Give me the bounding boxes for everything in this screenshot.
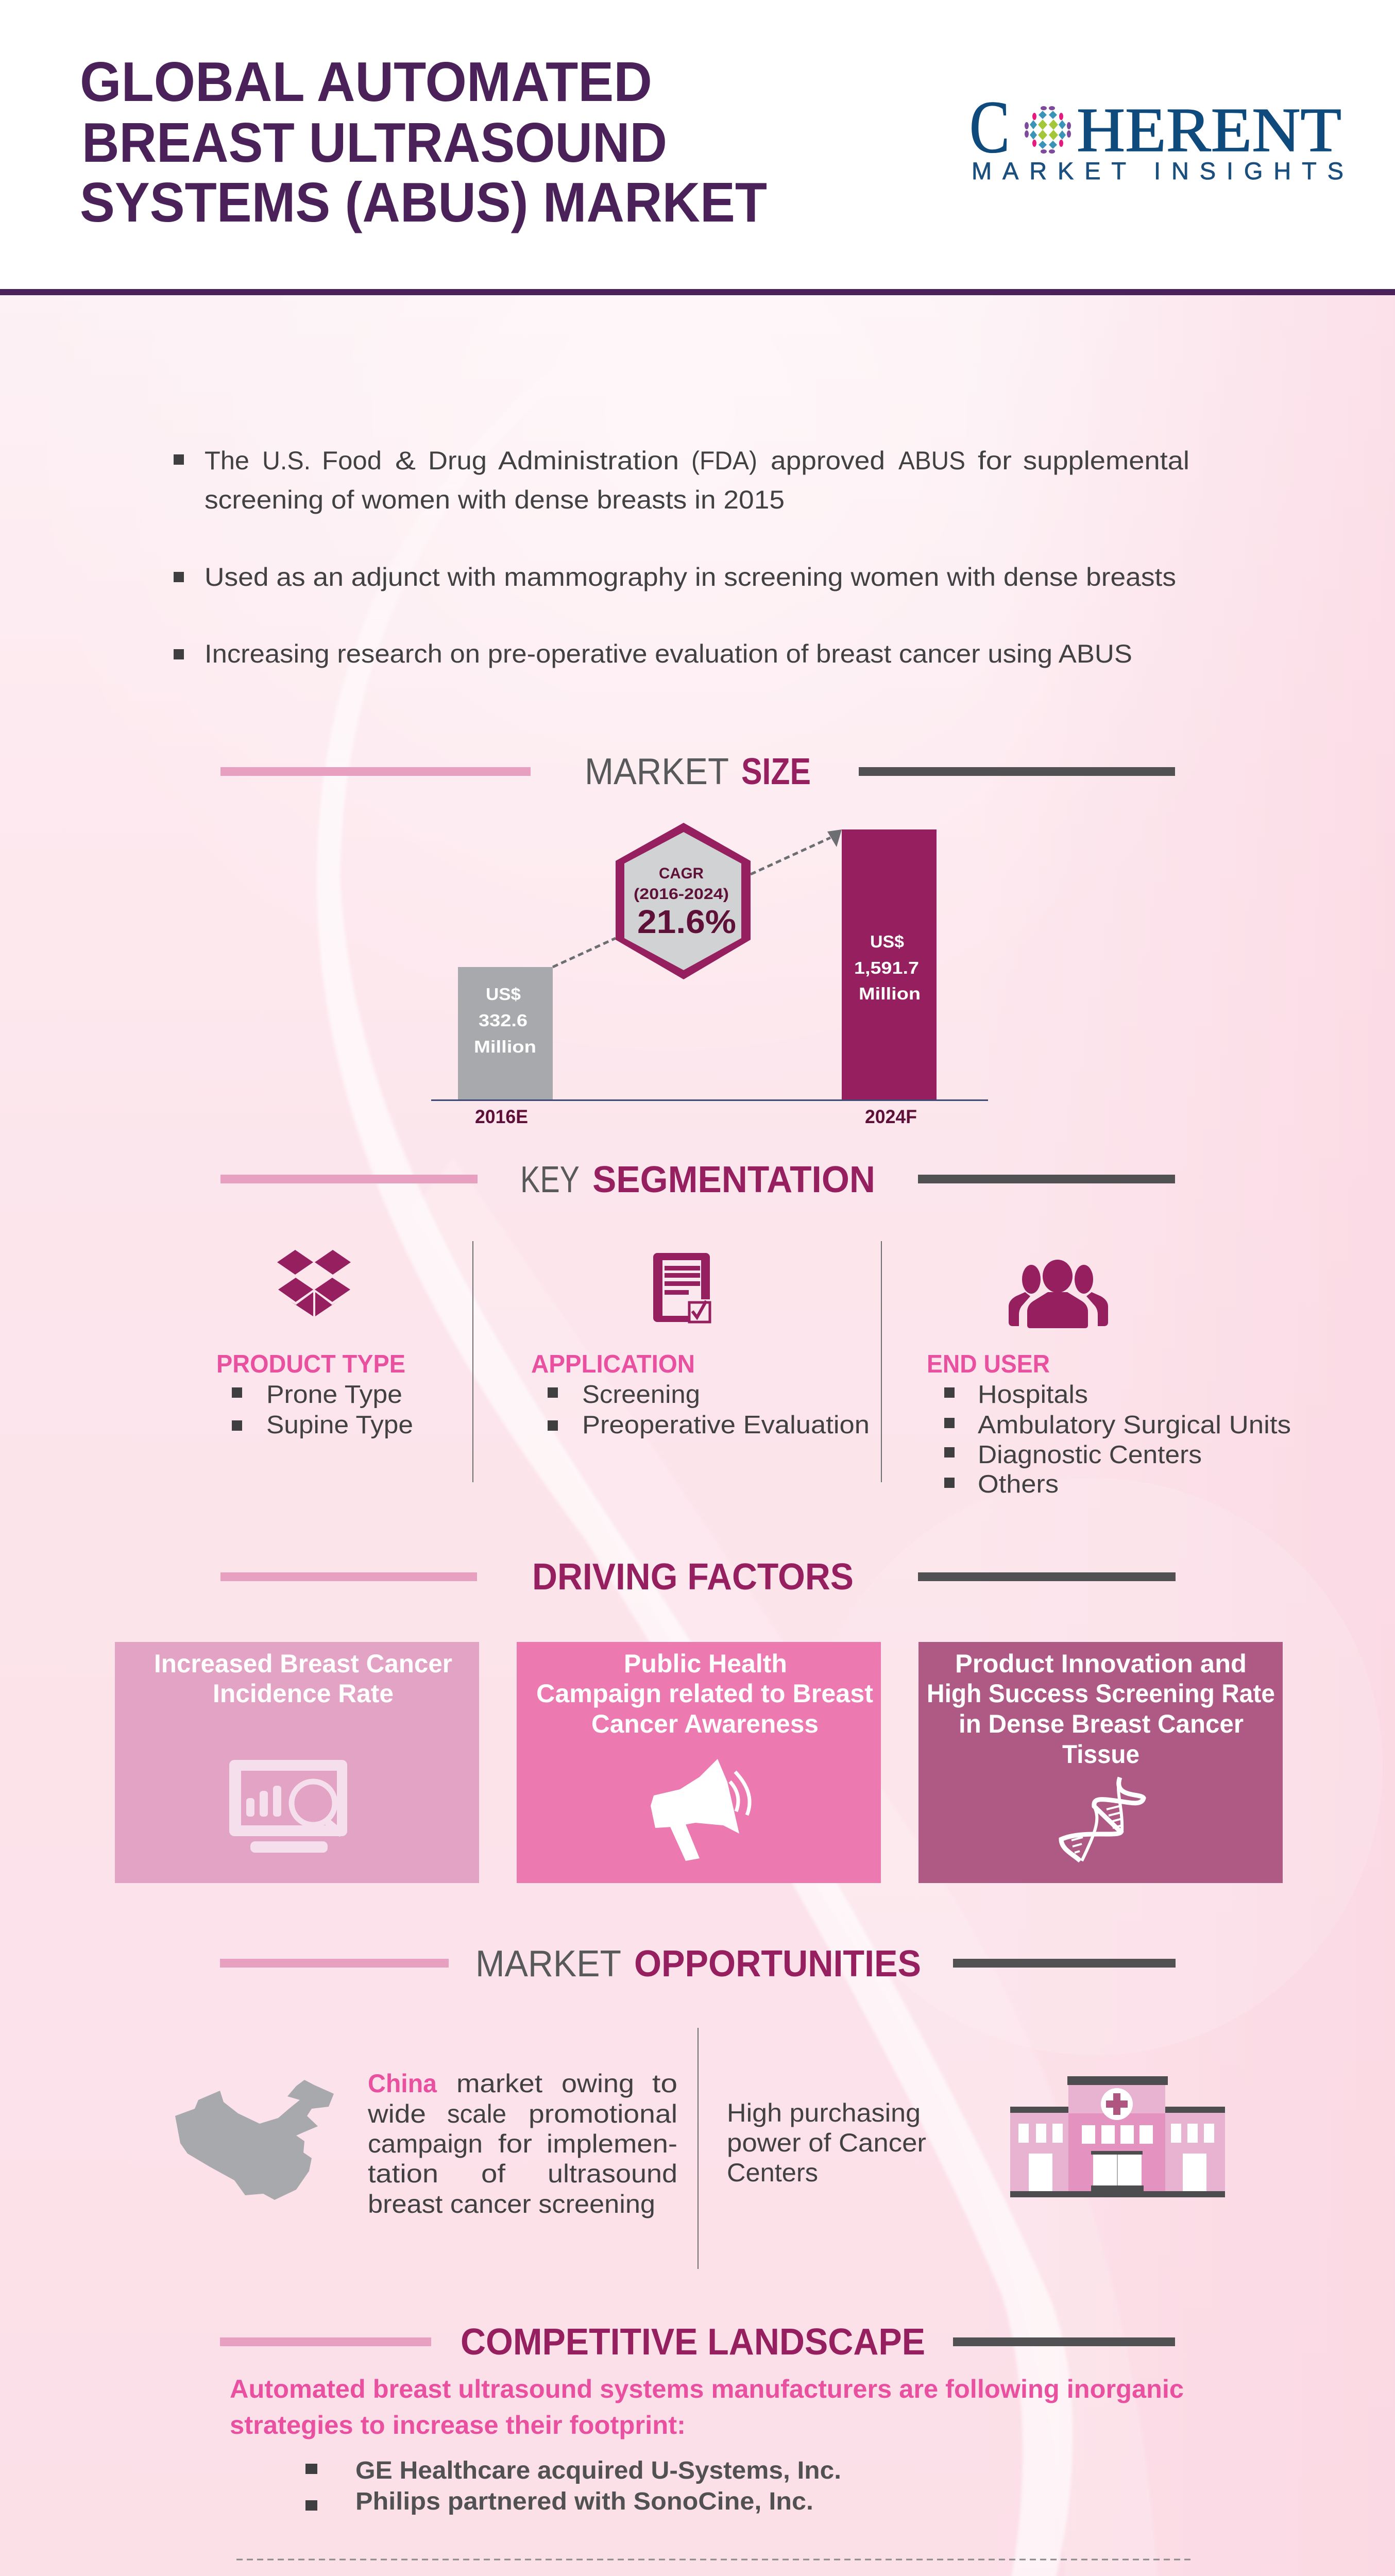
bullet 1: The xyxy=(205,446,249,475)
text: China market: tation xyxy=(368,2159,438,2188)
panel: product innovation: in Dense Breast Cancer xyxy=(959,1709,1244,1738)
panel: end user xyxy=(927,1260,1291,1498)
panel: product innovation: High Success Screening Rate xyxy=(927,1679,1275,1708)
logo: Coherent Market Insights: HERENT xyxy=(1077,95,1341,165)
bar 2024F: 1,591.7 xyxy=(854,958,919,977)
text: China market: scale xyxy=(447,2099,506,2128)
bullet 1: approved xyxy=(771,446,885,475)
panel: china opportunity xyxy=(175,2069,677,2218)
hexagon: CAGR: (2016-2024) xyxy=(634,886,729,903)
arrow: growth xyxy=(553,829,842,967)
heading: market opportunities: OPPORTUNITIES xyxy=(634,1943,921,1985)
axis labels: 2016E xyxy=(475,1106,528,1127)
bullet 1: supplemental xyxy=(1023,446,1189,475)
heading: key segmentation xyxy=(220,1159,1175,1200)
text: high purchasing power: High purchasing xyxy=(727,2098,921,2127)
bar 2024F xyxy=(842,829,937,1100)
bullet 3: Increasing research on pre-operative evaluation of breast cancer using ABUS xyxy=(205,639,1132,668)
heading: market size: SIZE xyxy=(741,751,811,792)
bar 2016E xyxy=(458,967,553,1100)
bullet 1: U.S. xyxy=(262,446,311,475)
logo: Coherent Market Insights: C xyxy=(969,86,1010,168)
heading: market opportunities xyxy=(220,1943,1176,1985)
icon: China map xyxy=(175,2080,334,2200)
top rule xyxy=(0,289,1395,295)
title: SYSTEMS (ABUS) MARKET xyxy=(80,171,767,234)
list: Diagnostic Centers xyxy=(978,1441,1202,1469)
bar chart: market size xyxy=(431,823,988,1127)
bullet 1: (FDA) xyxy=(691,446,757,475)
list: Others xyxy=(978,1470,1059,1498)
icon: checklist document xyxy=(653,1253,711,1322)
text: high purchasing power xyxy=(727,2098,926,2187)
heading: market opportunities: MARKET xyxy=(475,1943,621,1985)
hexagon: CAGR: CAGR xyxy=(659,865,704,882)
panel: increased breast cancer incidence rate xyxy=(115,1642,479,1883)
panel: product innovation xyxy=(918,1642,1283,1883)
heading: key segmentation: KEY xyxy=(520,1159,580,1200)
text: China market: of xyxy=(481,2159,505,2188)
panel: increased breast cancer incidence rate: Increased Breast Cancer xyxy=(154,1649,452,1678)
divider xyxy=(698,2028,699,2269)
text: inorganic strategies intro: Automated breast ultrasound systems manufacturers are following inorganic xyxy=(230,2375,1184,2403)
heading: APPLICATION xyxy=(531,1350,695,1378)
list xyxy=(232,1381,413,1439)
bullet 1 xyxy=(174,446,1189,514)
list: Ambulatory Surgical Units xyxy=(978,1411,1291,1439)
hexagon: CAGR xyxy=(616,823,751,979)
list: strategies: Philips partnered with SonoCine, Inc. xyxy=(355,2488,813,2515)
text: China market: market xyxy=(456,2069,542,2098)
bullet 1: Administration xyxy=(498,446,679,475)
list xyxy=(944,1381,1291,1498)
heading: END USER xyxy=(927,1350,1050,1378)
text: China market: ultrasound xyxy=(548,2159,677,2188)
bar 2016E: Million xyxy=(474,1037,536,1056)
panel: increased breast cancer incidence rate: Incidence Rate xyxy=(213,1679,394,1708)
intro bullets xyxy=(174,446,1189,668)
text: inorganic strategies intro xyxy=(230,2375,1184,2439)
bullet 1: & xyxy=(395,446,416,475)
list: strategies xyxy=(305,2457,841,2515)
list: Preoperative Evaluation xyxy=(582,1411,870,1439)
heading: market size xyxy=(220,751,1175,792)
bullet 1: screening of women with dense breasts in 2015 xyxy=(205,485,785,514)
icon: DNA helix xyxy=(1061,1777,1144,1861)
title: GLOBAL AUTOMATED xyxy=(80,50,652,113)
bullet 1: ABUS xyxy=(898,446,965,475)
icon: hospital xyxy=(1010,2076,1225,2197)
bar 2024F: US$ xyxy=(870,932,904,951)
bar 2016E: US$ xyxy=(486,985,521,1004)
list xyxy=(548,1381,870,1439)
list: Screening xyxy=(582,1381,700,1409)
text: high purchasing power: Centers xyxy=(727,2158,818,2187)
text: inorganic strategies intro: strategies to increase their footprint: xyxy=(230,2411,686,2439)
list: Hospitals xyxy=(978,1381,1088,1409)
axis labels: 2024F xyxy=(865,1106,917,1127)
bar 2024F: Million xyxy=(859,984,921,1003)
heading: market size: MARKET xyxy=(585,751,729,792)
title xyxy=(80,50,767,234)
text: China market: breast cancer screening xyxy=(368,2190,655,2218)
bar 2016E: 332.6 xyxy=(479,1011,528,1030)
heading: competitive landscape: COMPETITIVE LANDSCAPE xyxy=(461,2321,925,2363)
logo: Coherent Market Insights: MARKET INSIGHTS xyxy=(972,157,1343,184)
logo: Coherent Market Insights xyxy=(969,86,1343,184)
heading: key segmentation: SEGMENTATION xyxy=(592,1159,875,1200)
axis labels xyxy=(475,1106,917,1127)
heading: PRODUCT TYPE xyxy=(216,1350,405,1378)
text: China market: implemen- xyxy=(547,2129,677,2158)
list: Prone Type xyxy=(266,1381,402,1409)
list: strategies: GE Healthcare acquired U-Systems, Inc. xyxy=(355,2457,841,2484)
list: Supine Type xyxy=(266,1411,413,1439)
panel: product innovation: Product Innovation and xyxy=(955,1649,1247,1678)
panel: public health campaign: Public Health xyxy=(624,1649,787,1678)
dividers xyxy=(472,1241,473,1482)
panel: product type xyxy=(216,1250,413,1439)
heading: competitive landscape xyxy=(220,2321,1175,2363)
title: BREAST ULTRASOUND xyxy=(82,111,667,174)
icon: people group xyxy=(1009,1260,1108,1328)
icon: open box xyxy=(277,1250,351,1316)
text: China market: campaign xyxy=(368,2129,483,2158)
icon: monitor with magnifier xyxy=(229,1760,347,1853)
text: China market: for xyxy=(498,2129,532,2158)
text: China market: China xyxy=(368,2069,437,2098)
hexagon: CAGR: 21.6% xyxy=(637,903,736,940)
bullet 2: Used as an adjunct with mammography in screening women with dense breasts xyxy=(205,563,1176,591)
text: China market xyxy=(367,2069,677,2218)
bullet 1: for xyxy=(978,446,1012,475)
panel: public health campaign xyxy=(517,1642,881,1883)
logo sphere of coloured diamonds xyxy=(1025,106,1071,154)
bullet 1: Food xyxy=(322,446,382,475)
panel: cancer centers opportunity xyxy=(727,2076,1225,2197)
text: China market: owing xyxy=(562,2069,634,2098)
panel: public health campaign: Cancer Awareness xyxy=(591,1709,819,1738)
heading: driving factors: DRIVING FACTORS xyxy=(532,1556,854,1598)
bullet 1: Drug xyxy=(428,446,487,475)
panel: product innovation: Tissue xyxy=(1062,1740,1139,1769)
panel: public health campaign: Campaign related to Breast xyxy=(536,1679,873,1708)
panel: application xyxy=(531,1253,870,1439)
text: high purchasing power: power of Cancer xyxy=(727,2128,926,2157)
text: China market: to xyxy=(652,2069,677,2098)
header band xyxy=(0,0,1395,289)
icon: megaphone xyxy=(651,1759,750,1861)
heading: driving factors xyxy=(220,1556,1176,1598)
text: China market: wide xyxy=(367,2099,426,2128)
text: China market: promotional xyxy=(529,2099,677,2128)
